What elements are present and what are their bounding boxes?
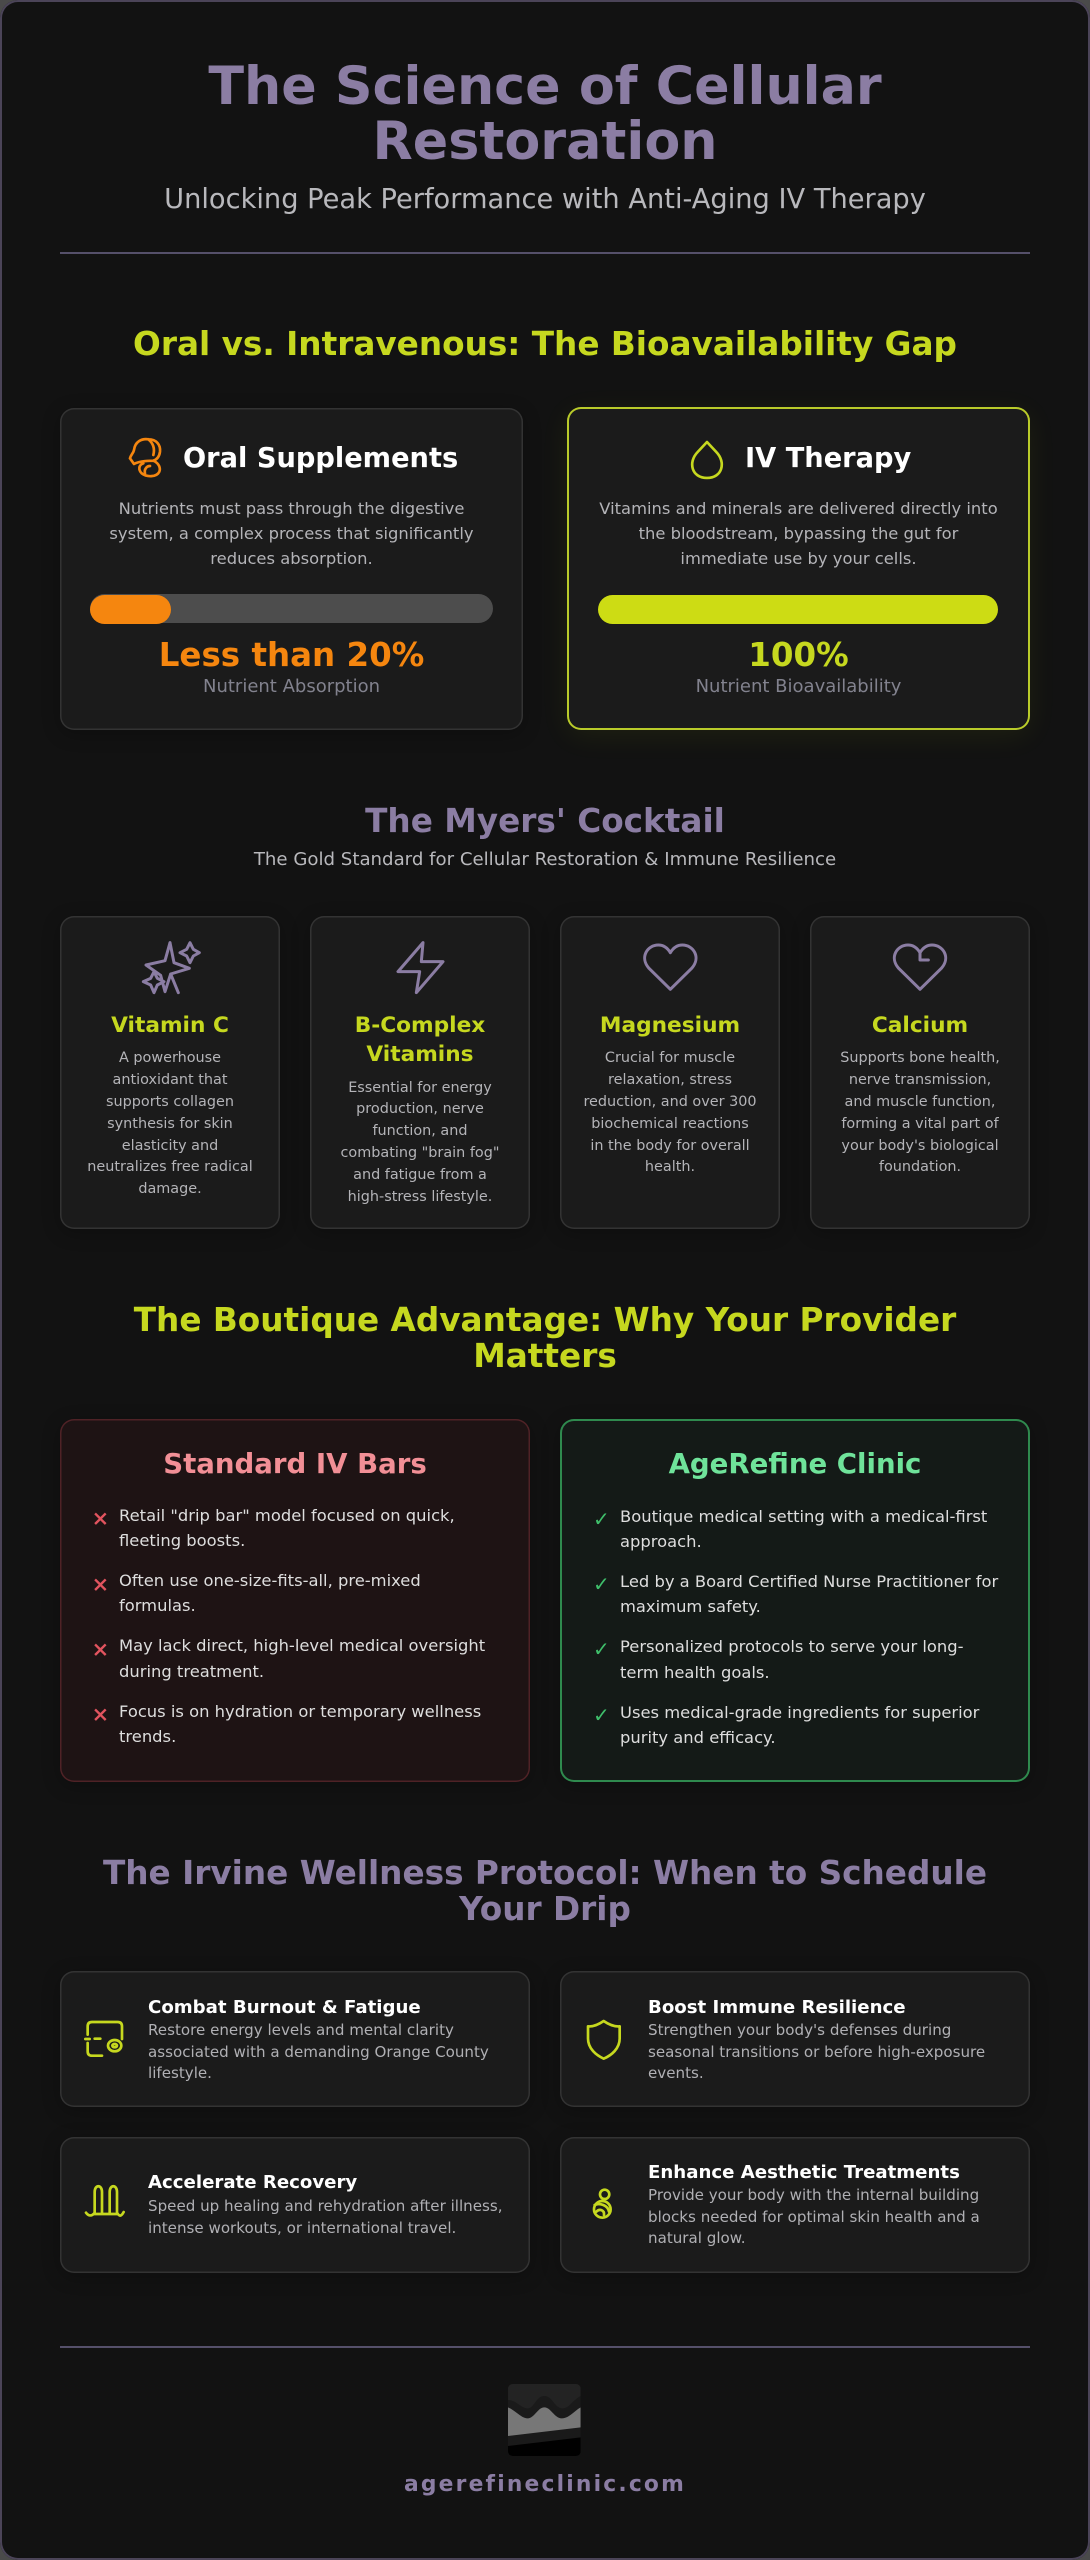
list item: Retail "drip bar" model focused on quick, (119, 1506, 455, 1525)
text: enhance aesthetic description (648, 2186, 980, 2247)
text: boost immune description: Strengthen your body's defenses during (648, 2021, 951, 2039)
list item: approach. (620, 1532, 702, 1551)
text: oral description: Nutrients must pass through the digestive (119, 499, 464, 518)
text: iv description: immediate use by your cells. (680, 549, 917, 568)
subtitle: Unlocking Peak Performance with Anti-Aging IV Therapy (164, 184, 926, 215)
heading: irvine wellness protocol (103, 1854, 987, 1928)
heading: b-complex vitamins: Vitamins (366, 1042, 474, 1067)
list item (92, 1636, 485, 1681)
text: oral description: system, a complex process that significantly (109, 524, 474, 543)
text: magnesium description: health. (645, 1159, 695, 1175)
heading: b-complex vitamins (355, 1013, 485, 1067)
icon: battery face (84, 2020, 124, 2057)
text: vitamin c description: antioxidant that (112, 1072, 227, 1088)
text: calcium description: nerve transmission, (849, 1072, 991, 1088)
text: boost immune description: events. (648, 2064, 704, 2082)
list item: ✕ (92, 1638, 109, 1662)
list item: Boutique medical setting with a medical-first (620, 1507, 987, 1526)
heading: boutique advantage (134, 1301, 956, 1375)
list item: Focus is on hydration or temporary wellness (119, 1702, 481, 1721)
heading: calcium: Calcium (872, 1013, 968, 1038)
list item: purity and efficacy. (620, 1728, 776, 1747)
text: vitamin c description: supports collagen (106, 1094, 234, 1110)
stat: less than 20%: Less than 20% (159, 636, 424, 674)
text: vitamin c description: synthesis for skin (107, 1116, 233, 1132)
list item (593, 1637, 964, 1682)
text: iv description: the bloodstream, bypassing the gut for (639, 524, 958, 543)
list item: during treatment. (119, 1662, 264, 1681)
heading: enhance aesthetic: Enhance Aesthetic Treatments (648, 2162, 960, 2183)
list item: ✓ (593, 1637, 610, 1661)
text: vitamin c description: damage. (138, 1181, 202, 1197)
text: b-complex description (341, 1080, 499, 1205)
text: combat burnout description: lifestyle. (148, 2064, 212, 2082)
icon: water drop (690, 440, 724, 480)
heading: the myers cocktail: The Myers' Cocktail (365, 802, 725, 840)
panel: enhance aesthetic (560, 2137, 1030, 2273)
list item: ✕ (92, 1572, 109, 1596)
list item: ✕ (92, 1703, 109, 1727)
icon: heart (643, 944, 698, 991)
heading: iv therapy: IV Therapy (745, 443, 911, 474)
chart: oral absorption bar (90, 594, 493, 623)
list item: Uses medical-grade ingredients for superior (620, 1703, 979, 1722)
text: boost immune description: seasonal transitions or before high-exposure (648, 2043, 985, 2061)
text: calcium description: and muscle function, (844, 1094, 995, 1110)
text: magnesium description: reduction, and over 300 (583, 1094, 757, 1110)
text: magnesium description (583, 1050, 757, 1175)
icon: recovery wave (84, 2184, 125, 2217)
list item: ✓ (593, 1507, 610, 1531)
list item: trends. (119, 1727, 176, 1746)
list item: Personalized protocols to serve your long- (620, 1637, 964, 1656)
list item: May lack direct, high-level medical oversight (119, 1636, 485, 1655)
text: combat burnout description (148, 2021, 489, 2082)
text: iv description (599, 499, 998, 568)
panel: iv therapy (567, 407, 1030, 730)
panel: agerefine clinic (560, 1419, 1030, 1782)
text: calcium description: Supports bone health, (840, 1050, 1000, 1066)
list item: term health goals. (620, 1663, 770, 1682)
text: magnesium description: Crucial for muscle (605, 1050, 735, 1066)
list item: Often use one-size-fits-all, pre-mixed (119, 1571, 421, 1590)
text: magnesium description: biochemical reactions (591, 1116, 749, 1132)
heading: combat burnout: Combat Burnout & Fatigue (148, 1997, 421, 2018)
title: Restoration (373, 111, 717, 172)
icon: oral stomach (128, 438, 162, 478)
title (208, 56, 882, 172)
icon: shield (586, 2020, 621, 2060)
heading: bioavailability gap: Oral vs. Intravenous: The Bioavailability Gap (133, 325, 957, 363)
panel: calcium (810, 916, 1030, 1229)
text: oral description: reduces absorption. (210, 549, 373, 568)
panel: combat burnout (60, 1971, 530, 2107)
heading: boutique advantage: Matters (473, 1337, 617, 1375)
text: enhance aesthetic description: blocks needed for optimal skin health and a (648, 2208, 980, 2226)
label: nutrient absorption: Nutrient Absorption (203, 676, 380, 697)
text: magnesium description: relaxation, stress (608, 1072, 732, 1088)
heading: oral supplements: Oral Supplements (183, 443, 458, 474)
panel: magnesium (560, 916, 780, 1229)
logo (508, 2384, 581, 2456)
panel: oral supplements (60, 408, 523, 730)
icon: figure swirl (592, 2188, 612, 2219)
text: vitamin c description: A powerhouse (119, 1050, 221, 1066)
text: accelerate recovery description (148, 2197, 503, 2237)
chart: iv bioavailability bar (598, 595, 998, 624)
heading: accelerate recovery: Accelerate Recovery (148, 2172, 357, 2193)
heading: agerefine clinic: AgeRefine Clinic (669, 1447, 921, 1480)
panel: b-complex vitamins (310, 916, 530, 1229)
text: b-complex description: combating "brain fog" (341, 1145, 499, 1161)
panel: accelerate recovery (60, 2137, 530, 2273)
heading: b-complex vitamins: B-Complex (355, 1013, 485, 1038)
list item: fleeting boosts. (119, 1531, 245, 1550)
panel: boost immune (560, 1971, 1030, 2107)
panel: standard iv bars (60, 1419, 530, 1782)
heading: standard iv bars: Standard IV Bars (163, 1447, 427, 1480)
list item (92, 1571, 421, 1615)
list item: ✓ (593, 1703, 610, 1727)
text: vitamin c description: neutralizes free radical (87, 1159, 253, 1175)
text: b-complex description: high-stress lifestyle. (348, 1189, 492, 1205)
text: magnesium description: in the body for overall (590, 1138, 750, 1154)
text: calcium description: your body's biological (841, 1138, 999, 1154)
text: oral description (109, 499, 474, 568)
heading: magnesium: Magnesium (600, 1013, 740, 1038)
list item (593, 1703, 980, 1747)
icon: lightning bolt (396, 941, 445, 994)
text: iv description: Vitamins and minerals are delivered directly into (599, 499, 998, 518)
text: accelerate recovery description: Speed up healing and rehydration after illness, (148, 2197, 503, 2215)
text: b-complex description: Essential for energy (348, 1080, 492, 1096)
stat: 100%: 100% (748, 636, 849, 674)
heading: vitamin c: Vitamin C (111, 1013, 229, 1038)
text: enhance aesthetic description: Provide your body with the internal building (648, 2186, 979, 2204)
list item (92, 1702, 481, 1746)
text: combat burnout description: Restore energy levels and mental clarity (148, 2021, 454, 2039)
text: calcium description: foundation. (879, 1159, 961, 1175)
text: calcium description: forming a vital part of (841, 1116, 999, 1132)
text: b-complex description: function, and (372, 1123, 468, 1139)
list item: maximum safety. (620, 1597, 761, 1616)
text: b-complex description: production, nerve (356, 1101, 484, 1117)
heading: boost immune: Boost Immune Resilience (648, 1997, 906, 2018)
text: calcium description (840, 1050, 1000, 1175)
icon: heart with notch (892, 944, 948, 991)
heading: irvine wellness protocol: Your Drip (459, 1890, 631, 1928)
subheading: gold standard: The Gold Standard for Cellular Restoration & Immune Resilience (254, 849, 836, 870)
list item (92, 1506, 455, 1550)
text: enhance aesthetic description: natural glow. (648, 2229, 746, 2247)
list item: formulas. (119, 1596, 196, 1615)
list item: ✓ (593, 1572, 610, 1596)
list item (593, 1572, 998, 1616)
heading: irvine wellness protocol: The Irvine Wellness Protocol: When to Schedule (103, 1854, 987, 1892)
label: nutrient bioavailability: Nutrient Bioavailability (696, 676, 901, 697)
text: b-complex description: and fatigue from a (353, 1167, 487, 1183)
title: The Science of Cellular (208, 56, 882, 117)
text: combat burnout description: associated with a demanding Orange County (148, 2043, 489, 2061)
text: boost immune description (648, 2021, 985, 2082)
text: vitamin c description: elasticity and (122, 1138, 218, 1154)
list item (593, 1507, 987, 1551)
panel: vitamin c (60, 916, 280, 1229)
heading: boutique advantage: The Boutique Advantage: Why Your Provider (134, 1301, 956, 1339)
list item: Led by a Board Certified Nurse Practitioner for (620, 1572, 998, 1591)
text: accelerate recovery description: intense workouts, or international travel. (148, 2219, 456, 2237)
bar fill: 20 percent (90, 595, 171, 624)
website url: agerefineclinic.com (404, 2472, 686, 2497)
icon: sparkles (142, 941, 201, 994)
list item: ✕ (92, 1507, 109, 1531)
text: vitamin c description (87, 1050, 253, 1197)
